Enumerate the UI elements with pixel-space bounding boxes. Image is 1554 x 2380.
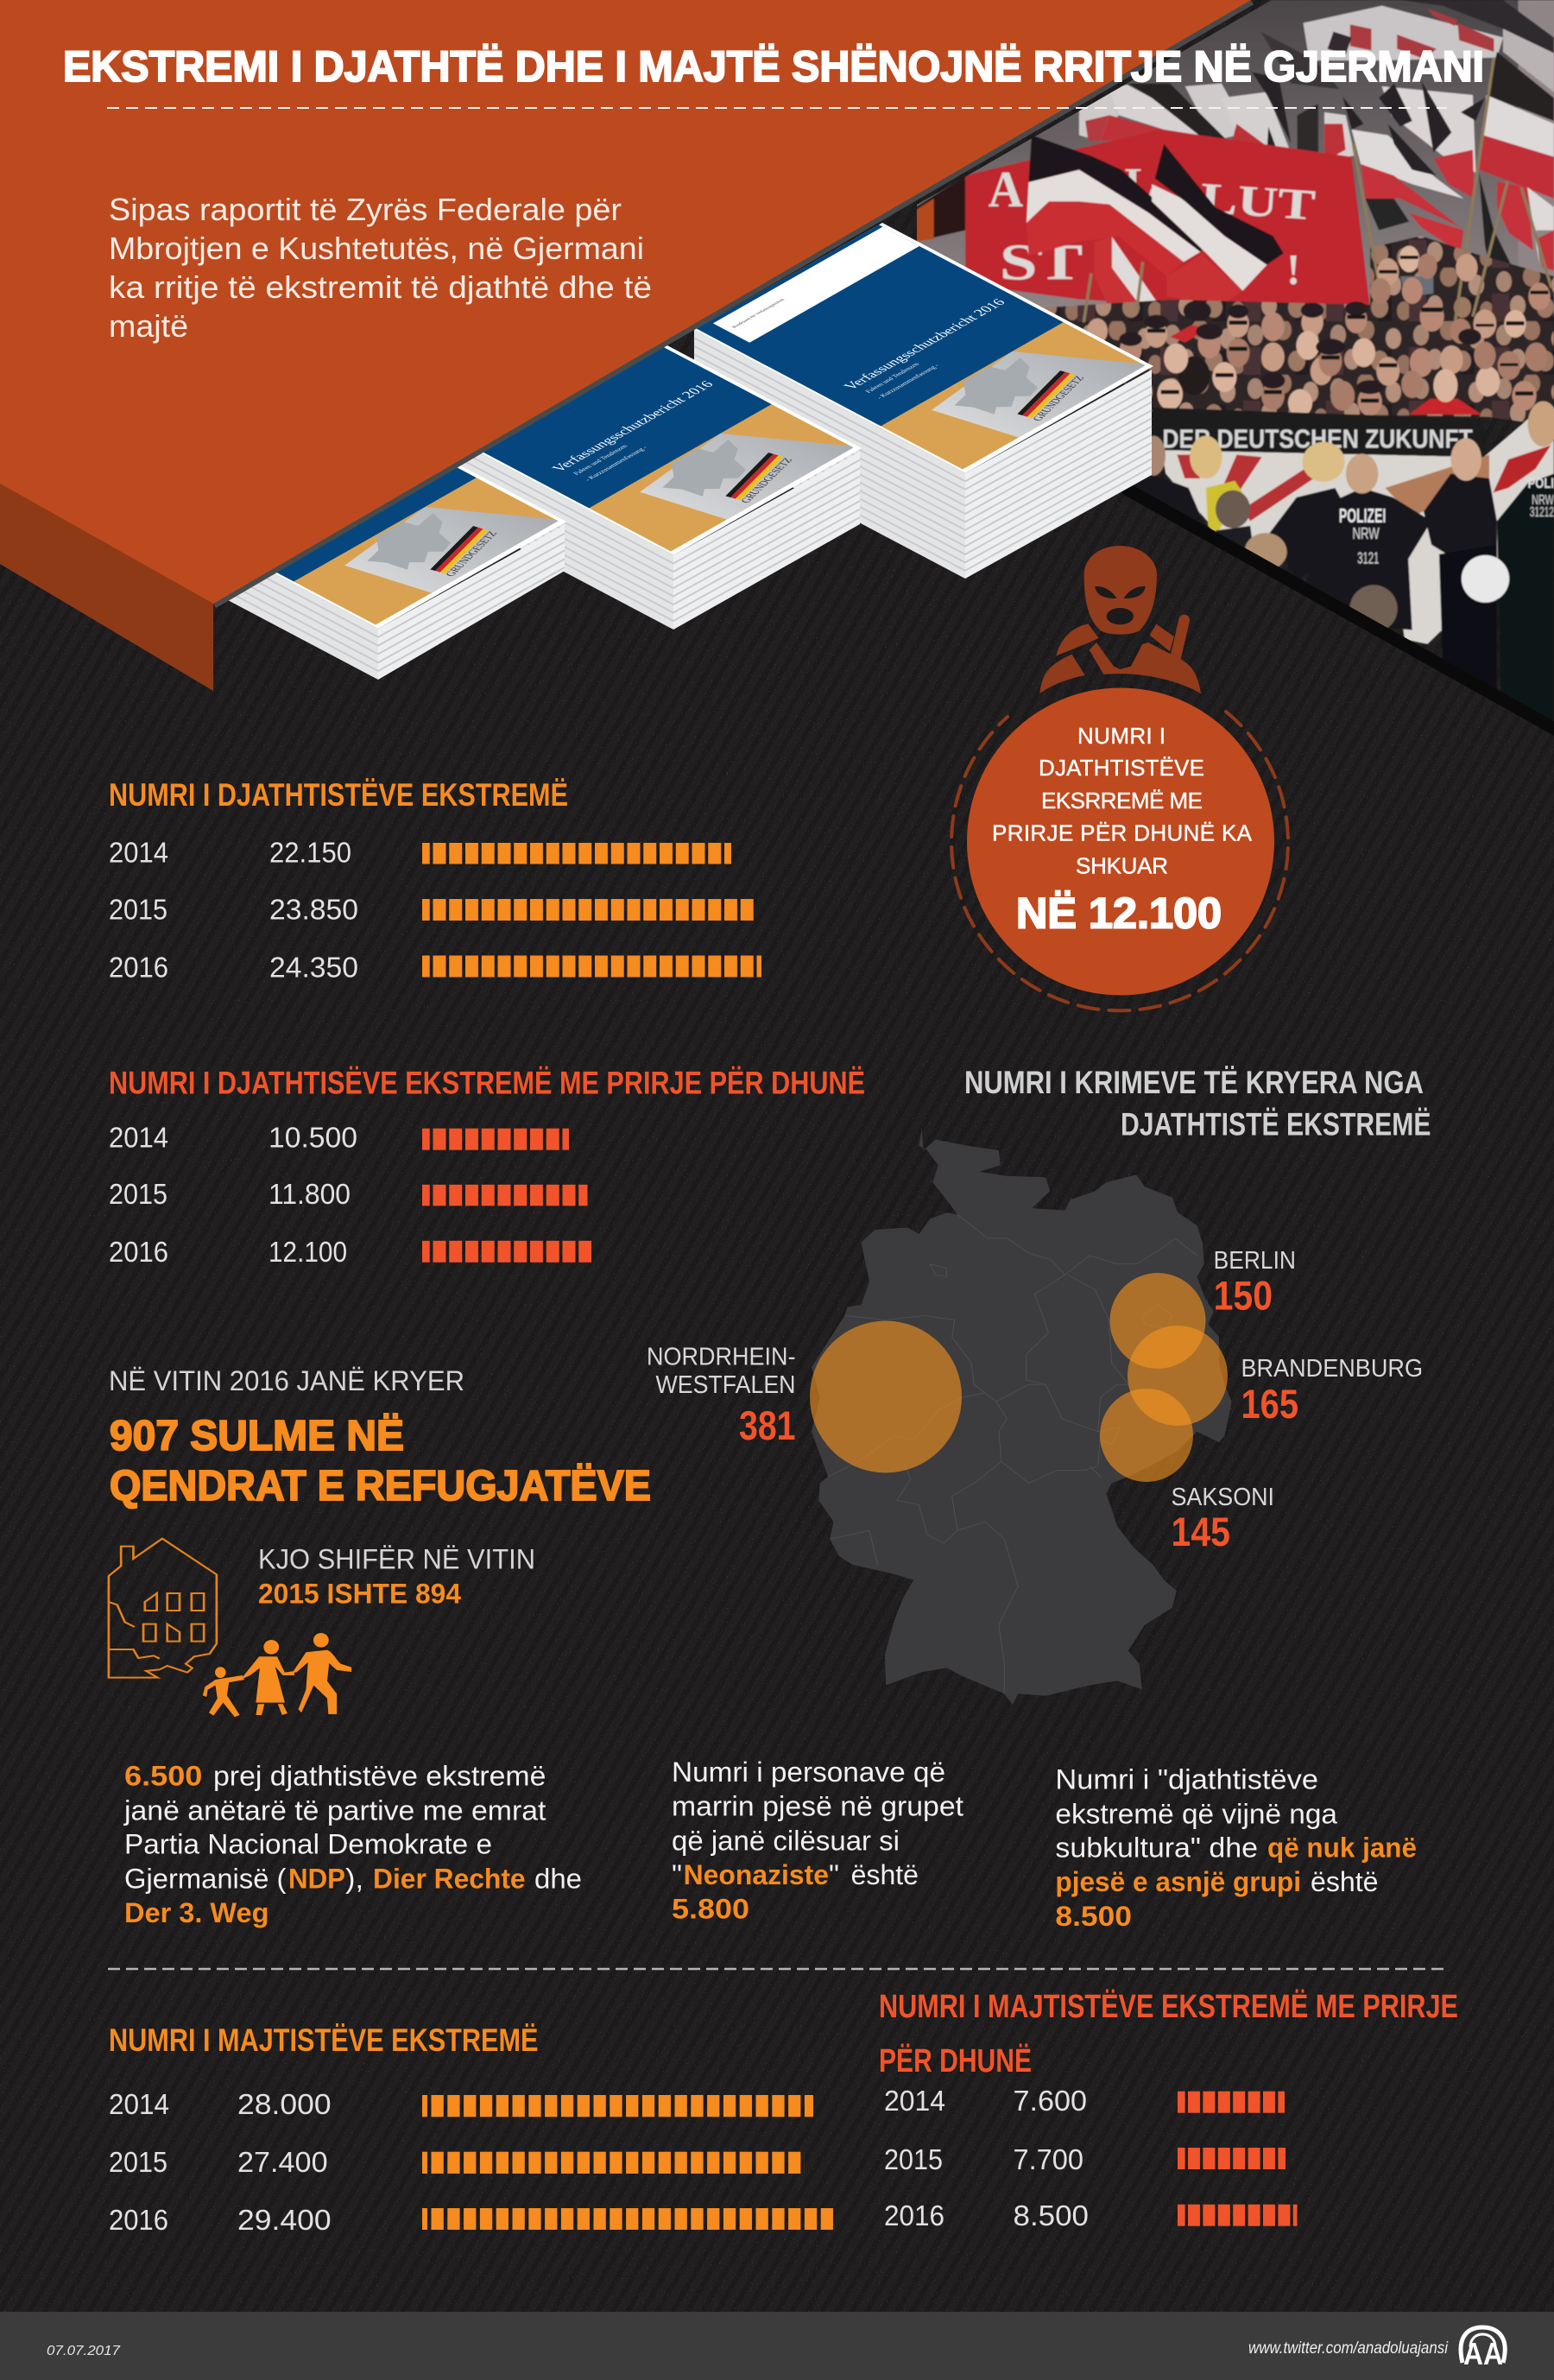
report cover: GRUNDGESETZ (1030, 375, 1087, 422)
text block: neo-Nazi groups: Numri i personave që (672, 1757, 945, 1788)
chart: right-wing extremists: 22.150 (269, 837, 351, 869)
map of Germany with crime circles (647, 1065, 1431, 1705)
chart: violent right-wing extremists: 2014 (109, 1121, 168, 1154)
report cover: GRUNDGESETZ (738, 457, 795, 504)
text block: subculture extremists: që nuk janë (1267, 1832, 1417, 1864)
text block: party members: janë anëtarë të partive me emrat (123, 1795, 546, 1826)
label: Nordrhein-Westfalen 381: NORDRHEIN- (647, 1344, 796, 1371)
text block: party members: Partia Nacional Demokrate e (124, 1829, 492, 1860)
chart: right-wing extremists: 23.850 (269, 893, 358, 926)
text block: party members: Gjermanisë ( (124, 1864, 287, 1895)
chart: violent left-wing extremists: PËR DHUNË (879, 2042, 1032, 2079)
chart: violent right-wing extremists: 2015 (109, 1178, 167, 1210)
report cover: Fakten und Tendenzen (863, 361, 921, 394)
protest banner: DER DEUTSCHEN ZUKUNFT (1162, 424, 1473, 453)
report cover: - Kurzzusammenfassung - (583, 445, 649, 482)
chart: left-wing extremists (109, 2022, 833, 2236)
foreground flags (1026, 136, 1285, 304)
label: Nordrhein-Westfalen 381: WESTFALEN (656, 1371, 796, 1399)
chart: violent left-wing extremists (879, 1988, 1458, 2231)
chart: violent right-wing extremists: 11.800 (268, 1178, 351, 1210)
source link: www.twitter.com/anadoluajansi (1248, 2339, 1449, 2358)
book stack: large 2016 report (694, 223, 1153, 579)
callout circle: violent right-wing extremists: NË 12.100 (1016, 889, 1222, 938)
intro text: Sipas raportit të Zyrës Federale për (109, 192, 622, 227)
report cover (694, 223, 1153, 473)
chart: violent left-wing extremists: 8.500 (1014, 2200, 1089, 2231)
text block: neo-Nazi groups: marrin pjesë në grupet (672, 1791, 963, 1822)
circle: Saksoni (1100, 1389, 1193, 1482)
intro text: Mbrojtjen e Kushtetutës, në Gjermani (109, 231, 644, 266)
red banner: ! (1286, 245, 1300, 294)
crowd faces and flag poles (1083, 58, 1551, 417)
chart: violent left-wing extremists: 2016 (884, 2200, 944, 2231)
text: 2015 comparison: KJO SHIFËR NË VITIN (258, 1544, 535, 1575)
text block: subculture extremists: ekstremë që vijnë nga (1055, 1799, 1337, 1830)
red banner: L (1125, 159, 1155, 207)
text block: neo-Nazi groups: " (672, 1859, 682, 1890)
text block: party members: NDP (288, 1864, 345, 1895)
chart: right-wing extremists: 2015 (109, 893, 167, 926)
report cover: Fakten und Tendenzen (572, 443, 629, 476)
chart: left-wing extremists: 27.400 (237, 2146, 328, 2178)
text block: party members: dhe (534, 1864, 582, 1895)
chart: violent left-wing extremists: 2014 (884, 2085, 945, 2117)
big statement: QENDRAT E REFUGJATËVE (110, 1463, 651, 1510)
text block: subculture extremists: 8.500 (1055, 1901, 1132, 1932)
report cover: Verfassungsschutzbericht 2016 (840, 296, 1008, 392)
text block: neo-Nazi groups: 5.800 (672, 1894, 749, 1925)
map heading: DJATHTISTË EKSTREMË (1121, 1107, 1431, 1142)
chart: violent right-wing extremists: 10.500 (268, 1121, 357, 1154)
chart: violent right-wing extremists: NUMRI I DJATHTISËVE EKSTREMË ME PRIRJE PËR DHUNË (109, 1066, 865, 1100)
chart: right-wing extremists (109, 777, 761, 983)
chart: violent left-wing extremists: 7.600 (1014, 2085, 1087, 2117)
police officers: POLI (1528, 476, 1554, 491)
text block: subculture extremists: është (1311, 1866, 1378, 1897)
label: Brandenburg 165: 165 (1241, 1381, 1298, 1427)
report cover: - Kurzzusammenfassung - (875, 363, 941, 400)
footer bar (0, 2312, 1554, 2380)
text block: neo-Nazi groups (672, 1757, 963, 1925)
crowd (1033, 236, 1554, 427)
chart: left-wing extremists: NUMRI I MAJTISTËVE EKSTREMË (109, 2022, 539, 2058)
red banner: ST (1000, 235, 1083, 291)
text: 2015 comparison (258, 1544, 535, 1610)
chart: right-wing extremists: 24.350 (269, 951, 358, 983)
text block: party members: ), (345, 1864, 363, 1895)
callout circle: violent right-wing extremists: SHKUAR (1076, 853, 1168, 879)
orange header panel with folded side (0, 0, 1251, 691)
icon: Anadolu Agency logo: AA (1463, 2336, 1503, 2371)
map: Germany outline (812, 1129, 1232, 1705)
chart: right-wing extremists: 2016 (109, 951, 168, 983)
text block: party members: Dier Rechte (373, 1864, 526, 1895)
callout circle: violent right-wing extremists: NUMRI I (1077, 723, 1166, 749)
circle: Brandenburg (1128, 1326, 1228, 1426)
chart: left-wing extremists: 2015 (109, 2146, 167, 2178)
callout circle: violent right-wing extremists: EKSRREMË ME (1041, 788, 1203, 813)
text block: neo-Nazi groups: Neonaziste (684, 1859, 829, 1890)
red banner: LUT (1198, 174, 1317, 230)
report cover (107, 378, 566, 629)
label: Brandenburg 165: BRANDENBURG (1241, 1355, 1423, 1383)
chart: violent right-wing extremists (109, 1066, 865, 1268)
police officers: 3121 (1357, 549, 1379, 567)
text block: neo-Nazi groups: " (829, 1859, 839, 1890)
police officers: POLIZEI (1339, 505, 1386, 527)
book stack: medium 2016 report (402, 305, 862, 630)
label: Berlin 150 (1214, 1247, 1296, 1318)
chart: left-wing extremists: 2016 (109, 2204, 168, 2236)
report cover (402, 305, 862, 555)
text block: neo-Nazi groups: që janë cilësuar si (672, 1826, 900, 1857)
text: attacks intro: NË VITIN 2016 JANË KRYER (109, 1365, 464, 1396)
label: Saksoni 145 (1171, 1484, 1274, 1554)
police officers (1131, 402, 1554, 725)
police officers: NRW (1352, 525, 1380, 543)
text block: party members: Der 3. Weg (124, 1897, 269, 1928)
text block: subculture extremists (1055, 1764, 1417, 1932)
photo: far-right march with flags, banners and police (913, 0, 1554, 725)
report cover: - Kurzzusammenfassung - (287, 518, 354, 555)
intro text: majtë (109, 308, 188, 344)
report cover: Bundesamt für Verfassungsschutz (732, 298, 787, 329)
report cover: GRUNDGESETZ (443, 530, 500, 578)
label: Saksoni 145: SAKSONI (1171, 1484, 1274, 1511)
label: Berlin 150: 150 (1214, 1273, 1273, 1318)
chart: right-wing extremists: NUMRI I DJATHTISTËVE EKSTREMË (109, 777, 568, 813)
chart: violent left-wing extremists: 2015 (884, 2143, 943, 2175)
circle: Berlin (1110, 1273, 1205, 1369)
callout circle: violent right-wing extremists (951, 687, 1288, 1010)
chart: right-wing extremists: 2014 (109, 837, 168, 869)
map heading: NUMRI I KRIMEVE TË KRYERA NGA (964, 1065, 1424, 1100)
red banner (965, 130, 1370, 309)
distant flags (1079, 0, 1554, 291)
date: 07.07.2017 (47, 2344, 121, 2358)
callout circle: violent right-wing extremists: PRIRJE PËR DHUNË KA (992, 820, 1253, 846)
chart: violent right-wing extremists: 12.100 (268, 1236, 347, 1268)
text block: party members (123, 1761, 582, 1928)
chart: left-wing extremists: 2014 (109, 2088, 169, 2120)
chart: violent right-wing extremists: 2016 (109, 1236, 168, 1268)
text block: party members: prej djathtistëve ekstremë (213, 1761, 546, 1792)
intro text: ka rritje të ekstremit të djathtë dhe të (109, 269, 652, 305)
text block: party members: 6.500 (124, 1761, 202, 1792)
icon: fleeing family (203, 1633, 351, 1717)
chart: left-wing extremists: 29.400 (237, 2204, 332, 2236)
icon: masked extremist (1039, 546, 1201, 693)
chart: violent left-wing extremists: 7.700 (1014, 2143, 1083, 2175)
report cover: Verfassungsschutzbericht 2016 (548, 378, 717, 474)
text: 2015 comparison: 2015 ISHTE 894 (258, 1579, 461, 1610)
red banner: A (989, 161, 1023, 218)
text block: neo-Nazi groups: është (851, 1859, 919, 1890)
attacks on refugee centres (109, 1365, 651, 1717)
title: EKSTREMI I DJATHTË DHE I MAJTË SHËNOJNË RRITJE NË GJERMANI (63, 42, 1484, 91)
protest banner (1152, 408, 1554, 644)
big statement: 907 SULME NË (110, 1413, 404, 1459)
big statement (110, 1413, 651, 1510)
circle: Nordrhein-Westfalen (810, 1321, 962, 1473)
label: Berlin 150: BERLIN (1214, 1247, 1296, 1275)
chart: left-wing extremists: 28.000 (237, 2088, 332, 2120)
text block: subculture extremists: pjesë e asnjë grupi (1055, 1866, 1301, 1897)
intro text (109, 192, 652, 344)
text block: subculture extremists: subkultura" dhe (1055, 1832, 1258, 1864)
label: Nordrhein-Westfalen 381 (647, 1344, 796, 1448)
map heading (964, 1065, 1431, 1142)
label: Saksoni 145: 145 (1171, 1509, 1230, 1554)
book stack: small 2016 report (107, 378, 566, 680)
label: Nordrhein-Westfalen 381: 381 (739, 1402, 796, 1448)
icon: damaged house (109, 1539, 217, 1678)
label: Brandenburg 165 (1241, 1355, 1423, 1427)
callout circle: violent right-wing extremists: DJATHTISTËVE (1039, 755, 1204, 781)
photo lower edge band (1122, 479, 1554, 736)
text block: subculture extremists: Numri i "djathtistëve (1055, 1764, 1318, 1795)
